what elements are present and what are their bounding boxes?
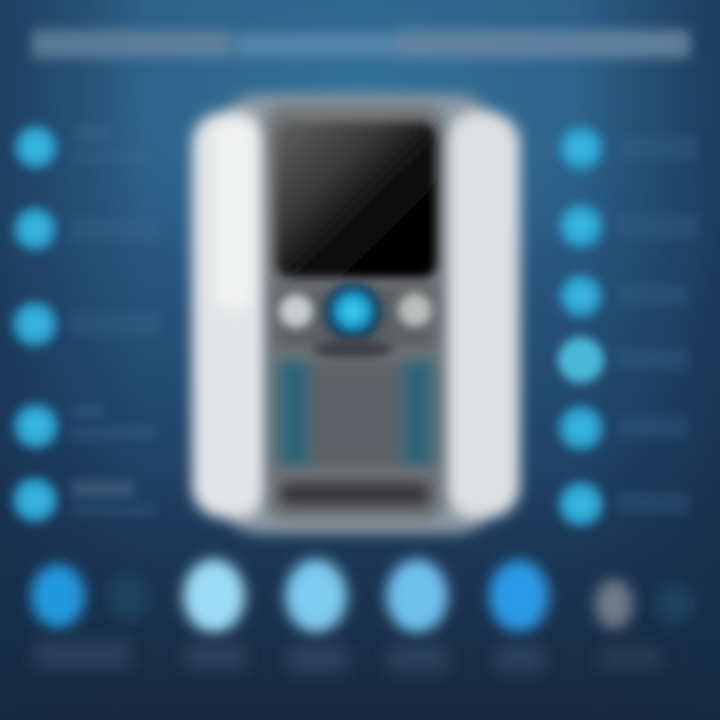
left marker 3	[12, 301, 160, 347]
bottom icon 3	[285, 559, 347, 672]
left marker 4	[13, 403, 155, 449]
centre cyan button	[324, 283, 382, 341]
device	[192, 94, 520, 534]
keypad	[278, 360, 434, 470]
left marker 2	[13, 207, 160, 251]
device outer shell	[192, 94, 520, 534]
left marker 5	[12, 477, 155, 523]
right marker 2	[558, 203, 698, 249]
right round button	[398, 293, 432, 327]
bottom row	[31, 559, 695, 672]
right feature list	[558, 125, 698, 527]
device chin	[280, 482, 430, 506]
bottom icon 4	[386, 559, 448, 672]
bottom icon 6	[595, 579, 695, 670]
right marker 1	[558, 125, 698, 171]
right marker 5	[558, 405, 688, 451]
left feature list	[12, 125, 160, 523]
bottom icon 2	[183, 559, 245, 670]
right marker 6	[558, 481, 688, 527]
right marker 4	[558, 337, 688, 383]
bottom icon 1	[31, 564, 148, 668]
device button panel	[276, 286, 434, 348]
left round button	[279, 294, 313, 328]
device screen	[276, 122, 436, 278]
bottom icon 5	[489, 560, 549, 672]
device grey body	[266, 104, 444, 522]
left marker 1	[14, 125, 155, 169]
right marker 3	[559, 274, 688, 318]
dark shadow below buttons	[313, 340, 393, 360]
title band	[32, 30, 690, 58]
